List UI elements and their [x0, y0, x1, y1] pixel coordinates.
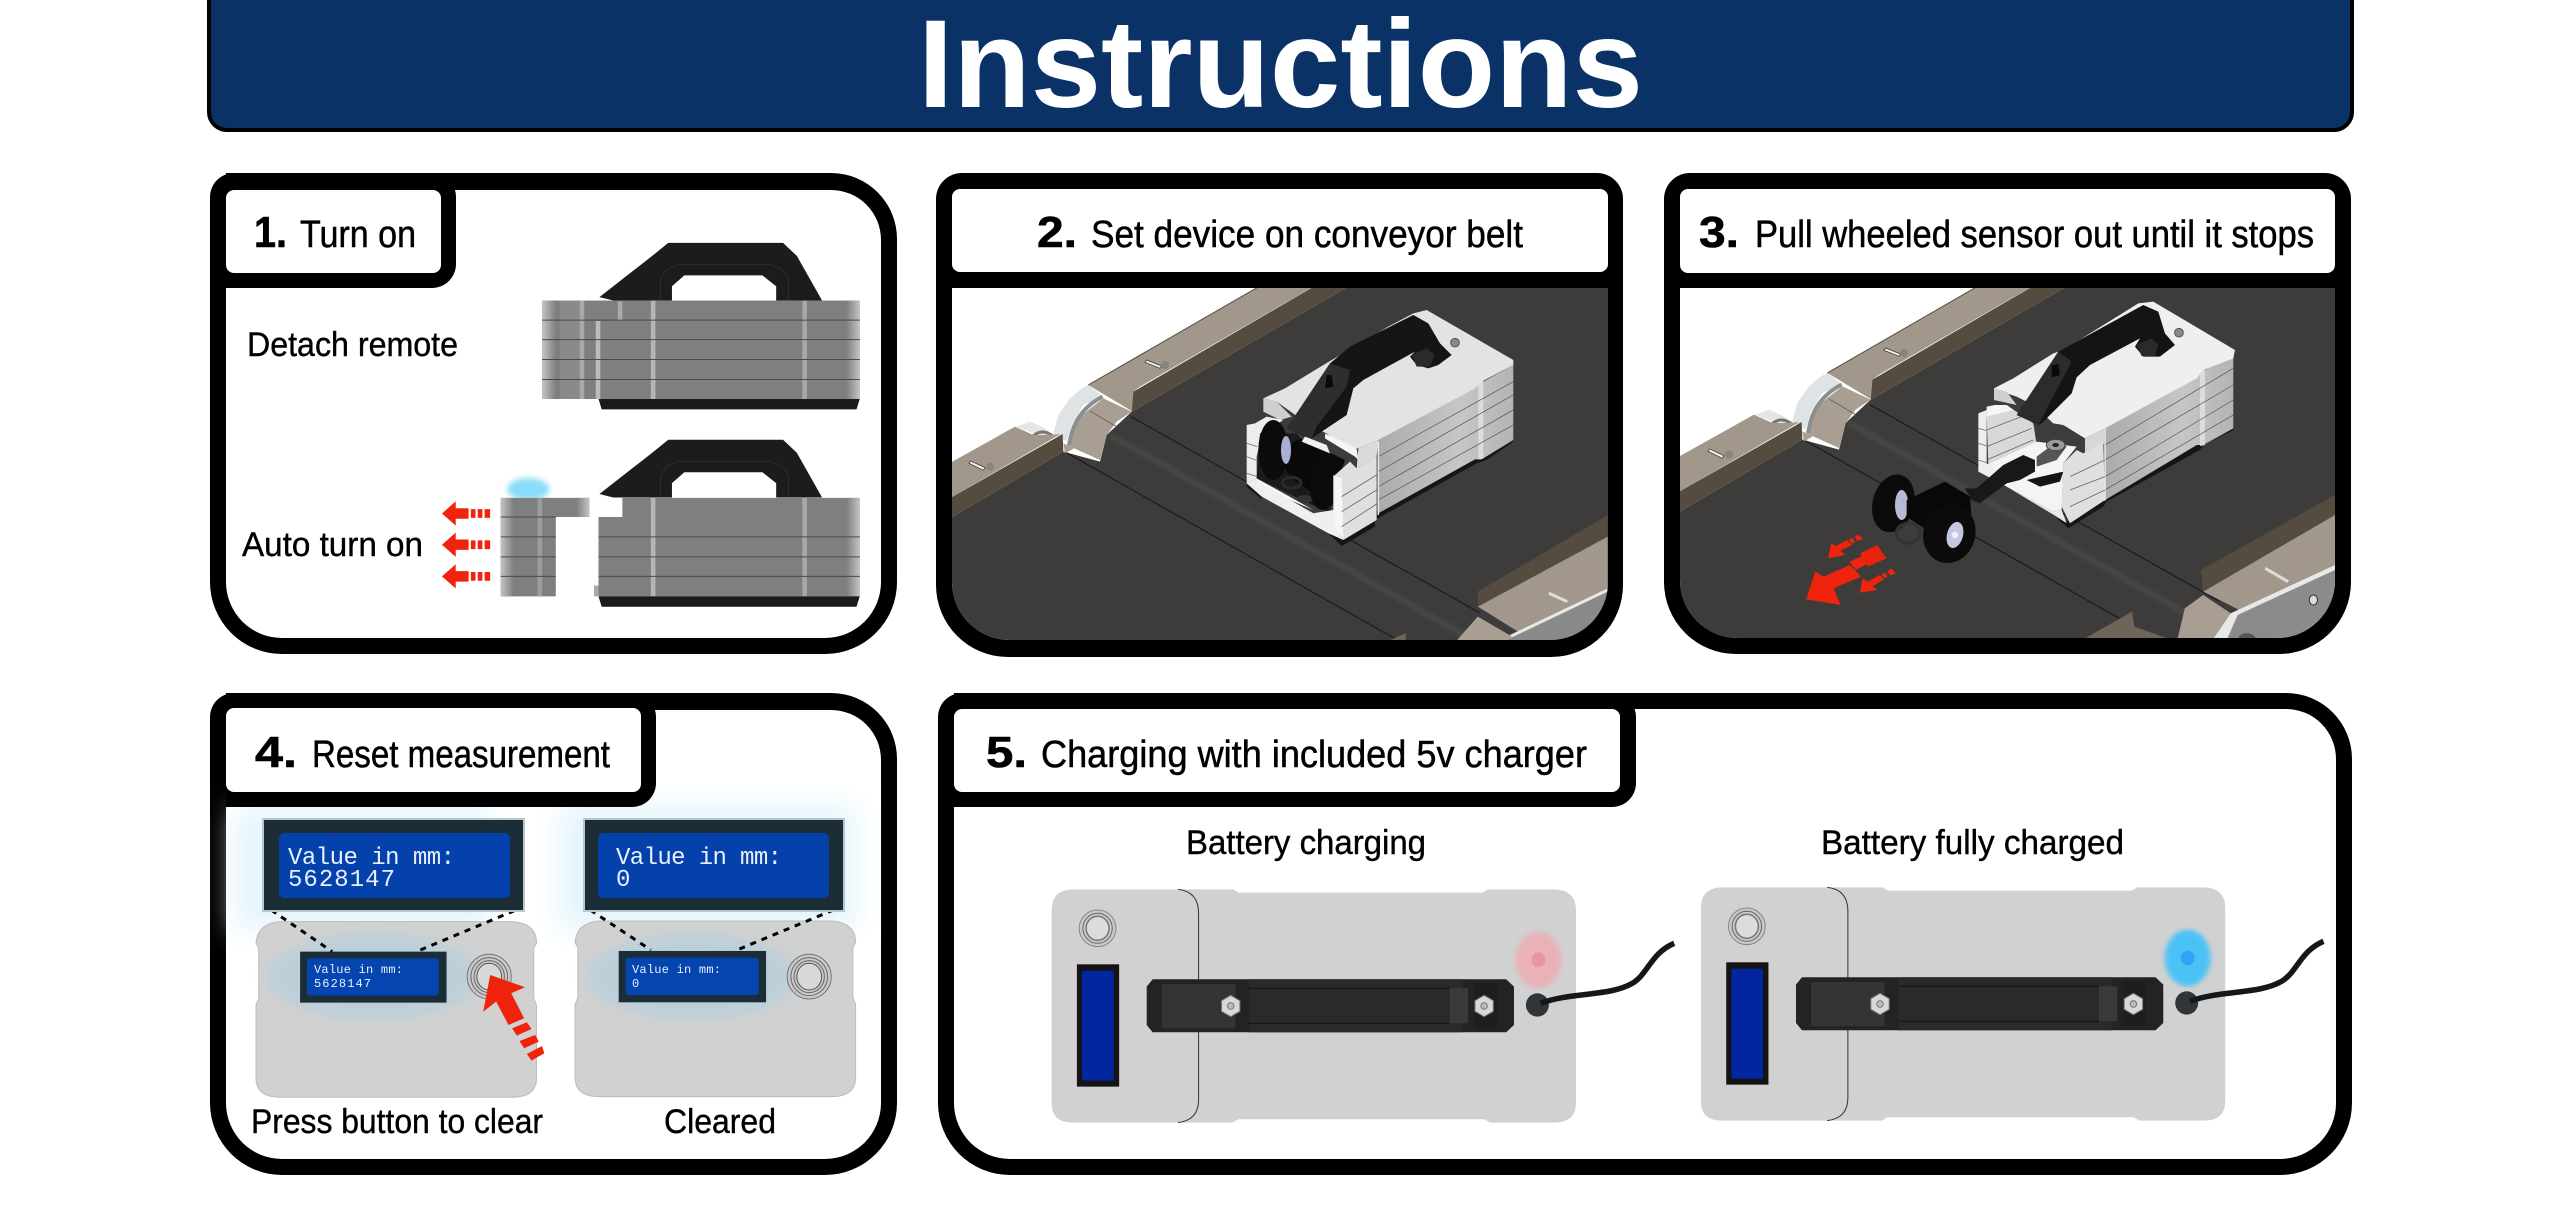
heading: step 2: Set device on conveyor belt	[1091, 214, 1523, 256]
small screen text: press button state: Value in mm:	[314, 963, 403, 977]
heading: step 3: Pull wheeled sensor out until it stops	[1755, 214, 2314, 256]
device side view: remote detached with blue glow	[501, 440, 860, 607]
arrows: remote pulled away	[442, 501, 490, 589]
panel: step 3 pull wheeled sensor	[1664, 173, 2351, 654]
heading: step 1: Turn on	[300, 214, 416, 256]
illustration: sensor pulled out	[1680, 288, 2335, 638]
text: detach remote: Detach remote	[247, 326, 458, 364]
heading: step 4	[226, 693, 656, 807]
heading: step 2: 2.	[1037, 208, 1077, 257]
device front: press button	[256, 910, 537, 1097]
small screen text: press button state	[314, 963, 403, 991]
device side view: remote attached	[542, 243, 860, 409]
enlarged screen: value 0: Value in mm:	[616, 845, 782, 872]
enlarged screen: value 0	[584, 819, 844, 911]
heading: step 3: 3.	[1699, 208, 1739, 257]
enlarged screen: value 5628147	[263, 819, 524, 911]
panel: step 1 turn on	[210, 173, 897, 654]
title banner	[209, 0, 2352, 134]
text: cleared: Cleared	[664, 1103, 776, 1141]
screen glow	[236, 805, 855, 930]
device: sensor housing	[1247, 310, 1513, 546]
text: press button to clear: Press button to clear	[251, 1103, 543, 1141]
heading: step 4: 4.	[255, 728, 297, 777]
text: battery fully charged: Battery fully charged	[1821, 824, 2124, 862]
device front: cleared	[575, 910, 856, 1097]
device top view: fully charged	[1701, 887, 2324, 1121]
illustration: device on conveyor	[952, 288, 1608, 640]
heading: step 1: 1.	[254, 208, 287, 257]
small screen text: press button state: 5628147	[314, 977, 371, 991]
heading: step 5: Charging with included 5v charger	[1041, 734, 1587, 776]
heading: step 4: Reset measurement	[312, 734, 610, 776]
enlarged screen: value 0: 0	[616, 867, 630, 894]
arrow: press button	[483, 975, 544, 1061]
heading: step 3	[1680, 189, 2335, 273]
small screen text: cleared state: 0	[632, 977, 639, 991]
heading: step 1	[226, 173, 456, 288]
enlarged screen: value 5628147: Value in mm:	[288, 845, 455, 872]
panel: step 5 charging	[938, 693, 2352, 1175]
panel: step 4 reset measurement	[210, 693, 897, 1175]
led: blue charged glow	[2165, 930, 2211, 986]
text: auto turn on: Auto turn on	[242, 526, 423, 564]
heading: step 2	[952, 189, 1608, 272]
small screen text: cleared state: Value in mm:	[632, 963, 721, 977]
panel: step 2 set device on conveyor belt	[936, 173, 1623, 657]
small screen text: cleared state	[632, 963, 721, 991]
text: battery charging: Battery charging	[1186, 824, 1426, 862]
heading: step 5	[954, 693, 1636, 807]
heading: step 5: 5.	[986, 728, 1027, 777]
arrows: pull direction	[1806, 535, 1896, 605]
led: red charging glow	[1515, 932, 1561, 988]
device: sensor housing and wheeled sensor	[1866, 302, 2235, 569]
enlarged screen: value 5628147: 5628147	[288, 867, 395, 894]
device top view: charging	[1052, 889, 1674, 1123]
